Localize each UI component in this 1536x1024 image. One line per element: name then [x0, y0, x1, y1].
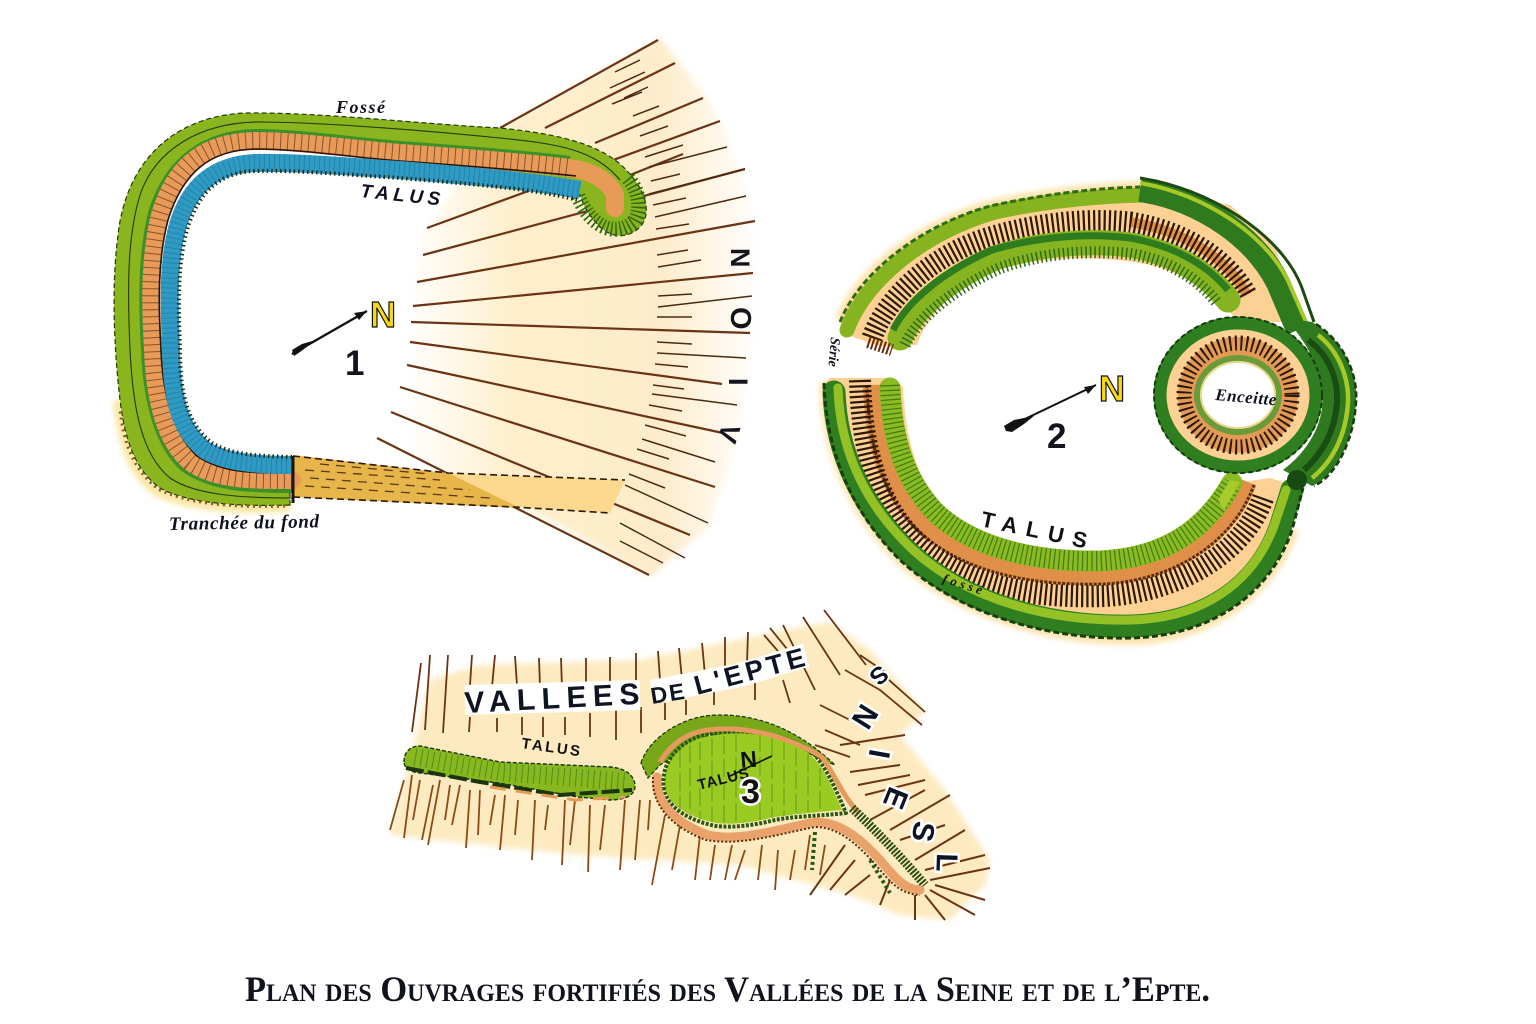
hachures: [412, 610, 925, 757]
label: SEINE letters: N: [845, 698, 884, 734]
north arrow 1: N: [370, 294, 396, 335]
north arrow 2: N: [1099, 368, 1125, 409]
label: VALLEES DE L'EPTE: DE: [649, 678, 688, 709]
label: SEINE letters: S: [905, 819, 941, 844]
north mark 3: [730, 746, 772, 776]
north arrow 2: [1004, 368, 1125, 432]
orange talus band: [151, 141, 615, 480]
figure 2: ring fort: [824, 178, 1356, 640]
sea letters N O I V: N: [725, 248, 755, 268]
sea letters N O I V: I: [723, 378, 753, 386]
label: TALUS: TALUS: [359, 181, 446, 211]
label: VALLEES DE L'EPTE: VALLEES: [464, 678, 647, 720]
inner green shading: [143, 133, 570, 489]
upper arc: sand base: [840, 186, 1296, 346]
trench end post: [292, 456, 294, 503]
circular enclosure: [1154, 317, 1322, 473]
fan of hachures: [377, 38, 757, 577]
label: TALUS: TALUS: [979, 506, 1098, 555]
lower arc: sand base: [824, 378, 1303, 638]
label: Tranchée du fond: Tranchée du fond: [169, 511, 320, 535]
title: Plan des Ouvrages fortifiés des Vallées de la Seine et de l’Epte.: [245, 969, 1210, 1009]
north arrow 1: [292, 294, 396, 356]
figure number 3: 3: [741, 773, 760, 811]
crescent bastion: [1283, 318, 1356, 490]
label: TALUS (inner): TALUS: [696, 765, 751, 794]
teardrop interior: [665, 733, 842, 824]
lower arc: hachures: [860, 380, 1264, 596]
right-hand radiating hachures: [810, 735, 990, 920]
teardrop banks: [663, 731, 846, 827]
upper arc: inner green: [900, 243, 1228, 338]
halo: [824, 186, 1294, 640]
label: marks on lower bank: fossé: [941, 571, 988, 599]
teardrop green cap: [641, 715, 835, 778]
label: Série: Série: [824, 337, 842, 367]
label: Fossé: Fossé: [335, 97, 387, 117]
halo: [118, 400, 290, 508]
sea letters N O I V: V: [712, 420, 746, 447]
label: SEINE letters: E: [876, 782, 914, 813]
figure 1: rectangular earthwork: [114, 38, 757, 577]
north mark 3: N: [739, 746, 758, 773]
label: Enceitte: Enceitte: [1214, 385, 1278, 409]
upper arc: hachures: [1130, 222, 1247, 295]
label: VALLEES DE L'EPTE: L'EPTE: [691, 641, 812, 701]
lower bank road: [657, 777, 920, 890]
label: SEINE letters: S: [864, 659, 893, 690]
trench extension: [293, 455, 625, 513]
right outer band: [1140, 190, 1298, 330]
label: VALLEES DE L'EPTE: [464, 641, 812, 720]
outer green bank (Fossé): [114, 113, 646, 505]
sea letters N O I V: [712, 248, 756, 447]
lower arc: inner green: [890, 388, 1232, 561]
upper arc: outer green: [847, 195, 1145, 330]
bank contour line: [129, 122, 620, 498]
lower arc: outer green: [834, 392, 1292, 626]
figure number 2: 2: [1047, 417, 1066, 456]
valley shading: [390, 622, 990, 920]
left talus: [404, 746, 635, 800]
sea letters N O I V: O: [724, 307, 756, 330]
lower arc: orange band: [872, 385, 1248, 576]
label: SEINE letters: I: [862, 747, 896, 761]
label: SEINE letters: [845, 659, 963, 872]
blue ditch: [170, 163, 580, 465]
scrub flecks on lower-left: [120, 410, 285, 506]
label: SEINE letters: L: [929, 853, 963, 872]
spur ridge: [852, 808, 925, 885]
hook hachures: [578, 178, 639, 229]
figure number 1: 1: [345, 344, 364, 383]
label: TALUS (left): TALUS: [520, 735, 584, 761]
lower arc: dark line: [867, 385, 1254, 584]
figure 3: confluence spur: [390, 610, 990, 920]
